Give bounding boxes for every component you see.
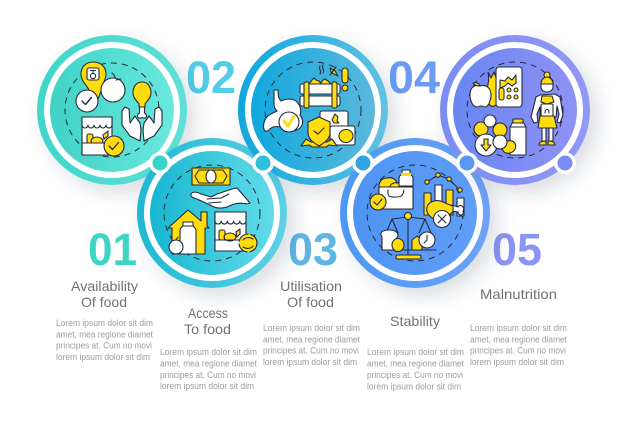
- icon: food bag, chart and scale: [370, 170, 464, 259]
- heading: availability of food: Availability: [71, 278, 138, 294]
- heading: utilisation of food: [280, 278, 342, 310]
- connector dot 3: [352, 152, 374, 174]
- heading: availability of food: [71, 278, 138, 310]
- number 04: 04: [388, 52, 440, 103]
- text block 5: lorem ipsum dolor sit dim: [470, 357, 564, 368]
- text block 1: amet, mea regione diamet: [56, 329, 153, 340]
- text block 1: lorem ipsum dolor sit dim: [56, 352, 150, 363]
- heading: access to food: Access: [188, 305, 228, 321]
- connector dot 5: [554, 152, 576, 174]
- panel: circle 1 availability of food: [37, 35, 187, 185]
- text block 3: [263, 323, 360, 368]
- text block 5: [470, 323, 567, 368]
- connector dot 1: [149, 152, 171, 174]
- panel: circle 2 access to food: [137, 138, 287, 288]
- text block 1: principes at. Cum no movi: [56, 341, 152, 352]
- number 01: 01: [88, 224, 137, 275]
- text block 3: amet, mea regione diamet: [263, 334, 360, 345]
- text block 2: Lorem ipsum dolor sit dim: [160, 347, 257, 358]
- text block 1: [56, 318, 153, 363]
- number 02: 02: [186, 52, 236, 103]
- heading: access to food: To food: [184, 321, 231, 337]
- panel: circle 4 stability: [340, 138, 490, 288]
- heading: malnutrition: Malnutrition: [480, 286, 557, 302]
- text block 4: lorem ipsum dolor sit dim: [367, 381, 461, 392]
- icon: money, hand, house and store: [168, 168, 257, 254]
- heading: stability: Stability: [390, 313, 440, 329]
- heading: availability of food: Of food: [81, 294, 127, 310]
- icon: digestion, stored food and safety shield: [264, 65, 355, 147]
- text block 4: [367, 347, 464, 392]
- number 03: 03: [288, 224, 338, 275]
- text block 1: Lorem ipsum dolor sit dim: [56, 318, 153, 329]
- icon: food supply: [76, 62, 162, 156]
- text block 5: amet, mea regione diamet: [470, 334, 567, 345]
- panel: circle 5 malnutrition: [440, 35, 590, 185]
- text block 3: Lorem ipsum dolor sit dim: [263, 323, 360, 334]
- text block 2: amet, mea regione diamet: [160, 358, 257, 369]
- text block 5: principes at. Cum no movi: [470, 346, 566, 357]
- text block 4: principes at. Cum no movi: [367, 370, 463, 381]
- panel: circle 3 utilisation of food: [238, 35, 388, 185]
- text block 2: [160, 347, 257, 392]
- text block 2: principes at. Cum no movi: [160, 370, 256, 381]
- text block 4: amet, mea regione diamet: [367, 358, 464, 370]
- heading: utilisation of food: Utilisation: [280, 278, 342, 294]
- connector dot 4: [456, 152, 478, 174]
- text block 2: lorem ipsum dolor sit dim: [160, 381, 254, 392]
- text block 5: Lorem ipsum dolor sit dim: [470, 323, 567, 334]
- heading: utilisation of food: Of food: [287, 294, 334, 310]
- connector dot 2: [252, 152, 274, 174]
- text block 3: principes at. Cum no movi: [263, 346, 359, 357]
- number 05: 05: [492, 224, 542, 275]
- icon: nutrition, vitamins and person: [470, 67, 563, 156]
- heading: access to food: [184, 305, 231, 337]
- text block 4: Lorem ipsum dolor sit dim: [367, 347, 464, 358]
- text block 3: lorem ipsum dolor sit dim: [263, 357, 357, 368]
